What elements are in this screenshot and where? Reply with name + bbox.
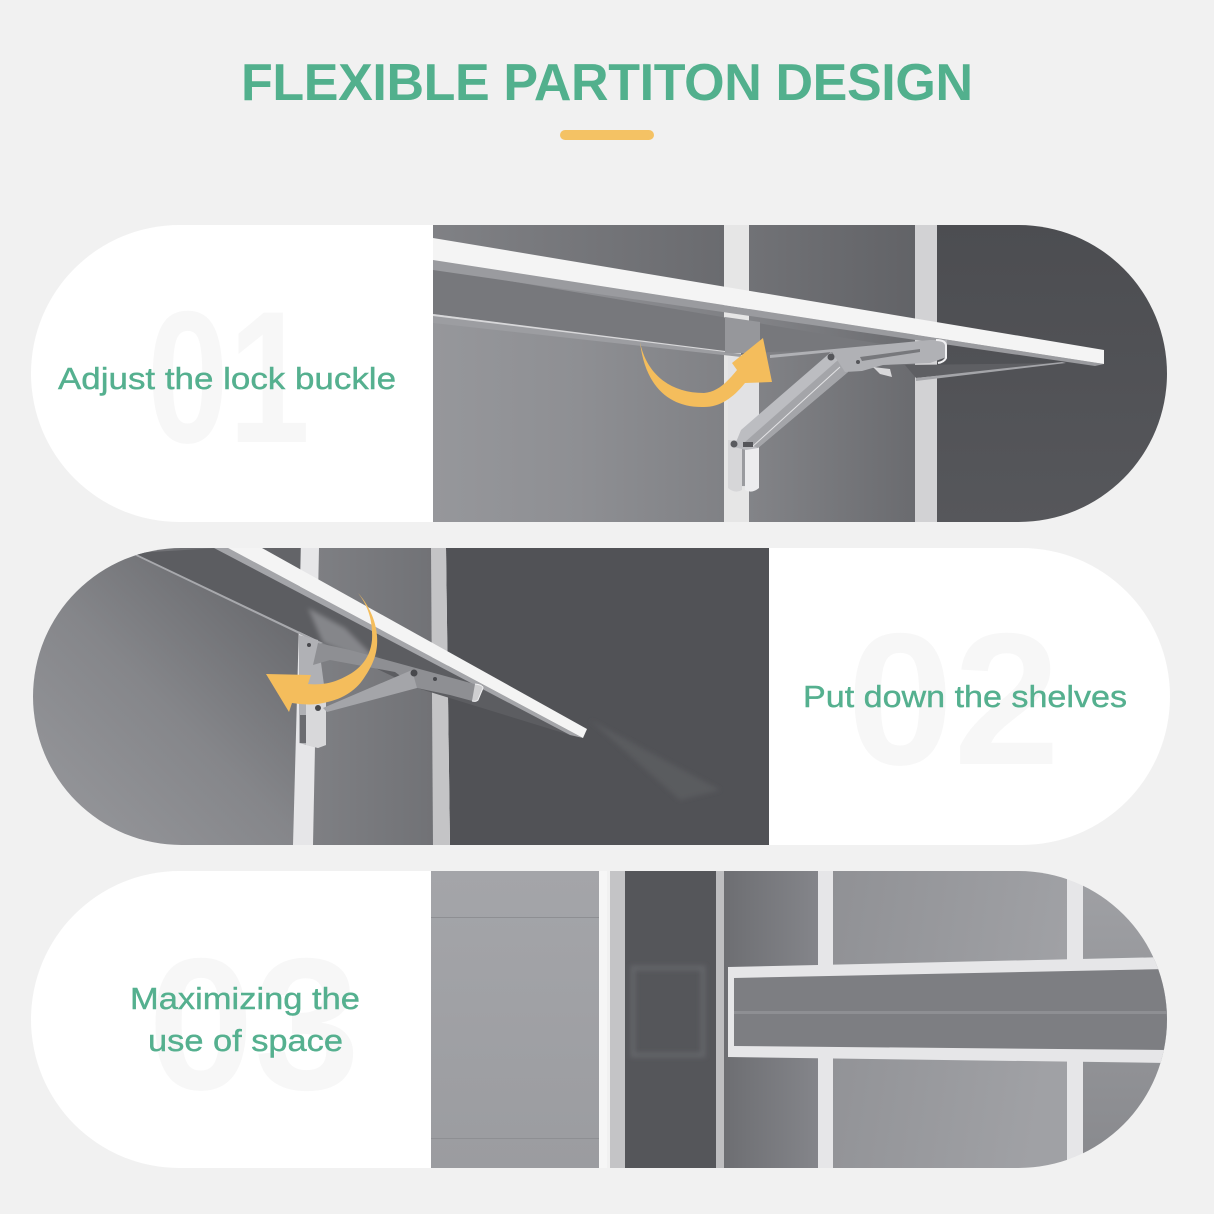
step 2 number: 02	[847, 594, 1060, 804]
icon: curved arrow down	[266, 593, 377, 712]
bracket top arm	[313, 643, 483, 702]
step 1 label: Adjust the lock buckle	[58, 361, 396, 396]
bracket arm	[730, 352, 848, 450]
step 3 label: Maximizing the	[130, 981, 360, 1016]
title accent bar	[560, 130, 654, 140]
step 3 label	[130, 981, 360, 1058]
title: FLEXIBLE PARTITON DESIGN	[241, 54, 973, 112]
step 3 photo: folded shelf	[431, 871, 1173, 1168]
panel: step 3	[31, 871, 1173, 1168]
bracket lower arm	[323, 670, 417, 712]
bracket screws and latch	[307, 643, 483, 711]
step 2 photo: shelf lowering	[33, 548, 769, 845]
step 3 number: 03	[148, 919, 360, 1129]
step 3 label: use of space	[148, 1023, 343, 1058]
bracket top arm with latch	[770, 340, 947, 377]
panel: step 1	[31, 225, 1177, 522]
step 1 number: 01	[147, 272, 310, 482]
bracket vertical plate	[728, 382, 759, 492]
step 1 photo: shelf and bracket	[433, 225, 1177, 522]
folded shelf face	[728, 957, 1168, 1063]
step 2 label: Put down the shelves	[803, 679, 1127, 714]
step 2 white background	[33, 548, 1170, 845]
icon: curved arrow up	[640, 338, 772, 407]
step 3 white background	[31, 871, 1167, 1168]
bracket vertical plate	[299, 635, 326, 748]
panel: step 2	[33, 548, 1170, 845]
step 1 white background	[31, 225, 1167, 522]
